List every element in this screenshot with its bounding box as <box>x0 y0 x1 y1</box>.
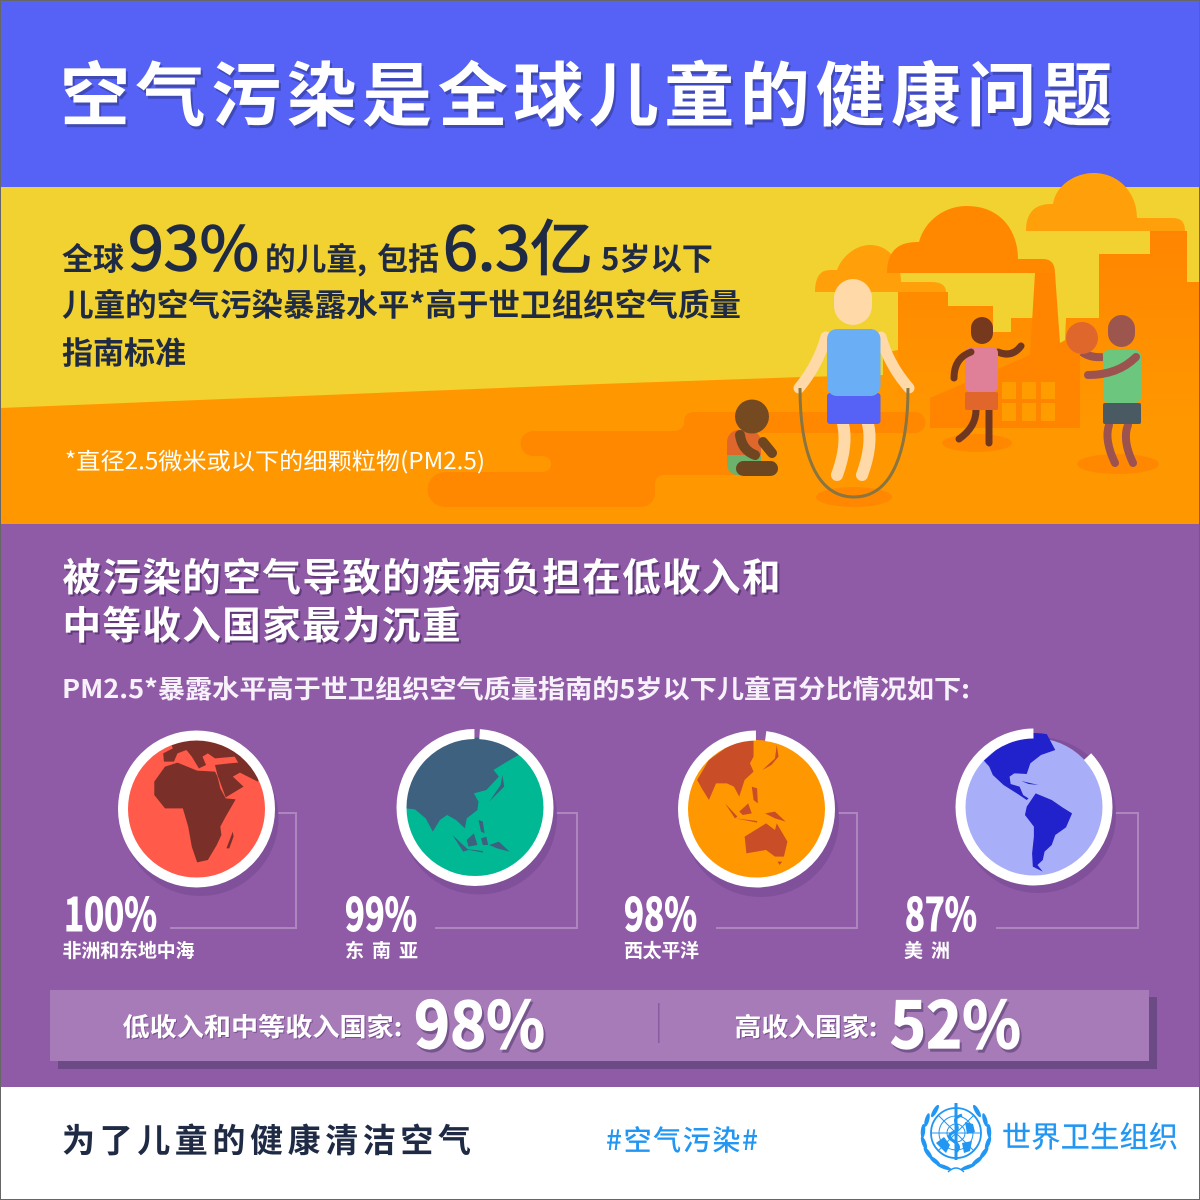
factory windows <box>1002 382 1055 421</box>
headline statistic: 6.3亿 <box>443 201 593 288</box>
low and middle income: 98% <box>414 975 545 1067</box>
region name: 美 洲 <box>904 936 950 963</box>
percent: 98% <box>624 879 697 945</box>
high income: 52% <box>890 975 1021 1067</box>
high income <box>734 975 1021 1067</box>
map: Americas <box>984 730 1072 872</box>
map: Asia <box>406 738 518 853</box>
low and middle income <box>122 975 545 1067</box>
child: sitting <box>727 400 778 476</box>
ground <box>0 350 1200 525</box>
header band <box>0 0 1200 188</box>
footer <box>0 1087 1200 1200</box>
region: Western Pacific <box>624 736 857 963</box>
panel: purple regional data <box>0 524 1200 1088</box>
percent: 99% <box>345 879 417 945</box>
map: Africa <box>154 740 258 862</box>
ground cover <box>880 428 1200 525</box>
headline statistic: 全球 <box>62 234 124 279</box>
footnote: *直径2.5微米或以下的细颗粒物(PM2.5) <box>65 442 485 476</box>
region: Africa and Eastern Mediterranean <box>62 733 296 963</box>
cloud: dark centre <box>887 206 1055 273</box>
child: skipping rope <box>799 279 909 507</box>
slogan: 为了儿童的健康清洁空气 <box>62 1114 471 1162</box>
headline statistic: 93% <box>128 201 259 288</box>
region name: 东 南 亚 <box>345 936 418 963</box>
heading <box>62 557 780 648</box>
headline statistic <box>62 201 741 373</box>
high income: 高收入国家: <box>734 1007 878 1044</box>
headline statistic: 指南标准 <box>62 328 186 373</box>
low and middle income: 低收入和中等收入国家: <box>122 1007 402 1044</box>
skyline buildings <box>898 231 1200 428</box>
headline statistic: 5岁以下 <box>601 234 713 279</box>
percent: 100% <box>64 879 157 945</box>
percent: 87% <box>905 879 977 945</box>
subheading: PM2.5*暴露水平高于世卫组织空气质量指南的5岁以下儿童百分比情况如下: <box>62 669 970 706</box>
child: holding ball <box>1066 315 1159 474</box>
icon: WHO emblem <box>920 1103 992 1172</box>
title: 空气污染是全球儿童的健康问题 <box>60 40 1112 141</box>
organisation name: 世界卫生组织 <box>1002 1114 1178 1156</box>
region name: 非洲和东地中海 <box>62 936 194 963</box>
ground smear shape <box>428 412 926 507</box>
headline statistic: 儿童的空气污染暴露水平*高于世卫组织空气质量 <box>62 280 741 325</box>
region: Americas <box>904 730 1138 963</box>
headline statistic: 的儿童, <box>265 234 367 279</box>
child: pink shirt <box>942 317 1021 452</box>
region: South-East Asia <box>345 720 577 963</box>
cloud: light left <box>815 245 946 292</box>
income comparison bar <box>50 975 1157 1069</box>
cloud: light right <box>1026 173 1185 231</box>
map: Western Pacific <box>697 740 787 865</box>
heading: 中等收入国家最为沉重 <box>62 605 460 648</box>
hashtag: #空气污染# <box>606 1119 758 1159</box>
factory <box>930 273 1080 428</box>
region name: 西太平洋 <box>624 936 699 963</box>
panel: yellow exposure scene <box>0 173 1200 525</box>
headline statistic: 包括 <box>377 234 439 279</box>
heading: 被污染的空气导致的疾病负担在低收入和 <box>62 557 780 600</box>
